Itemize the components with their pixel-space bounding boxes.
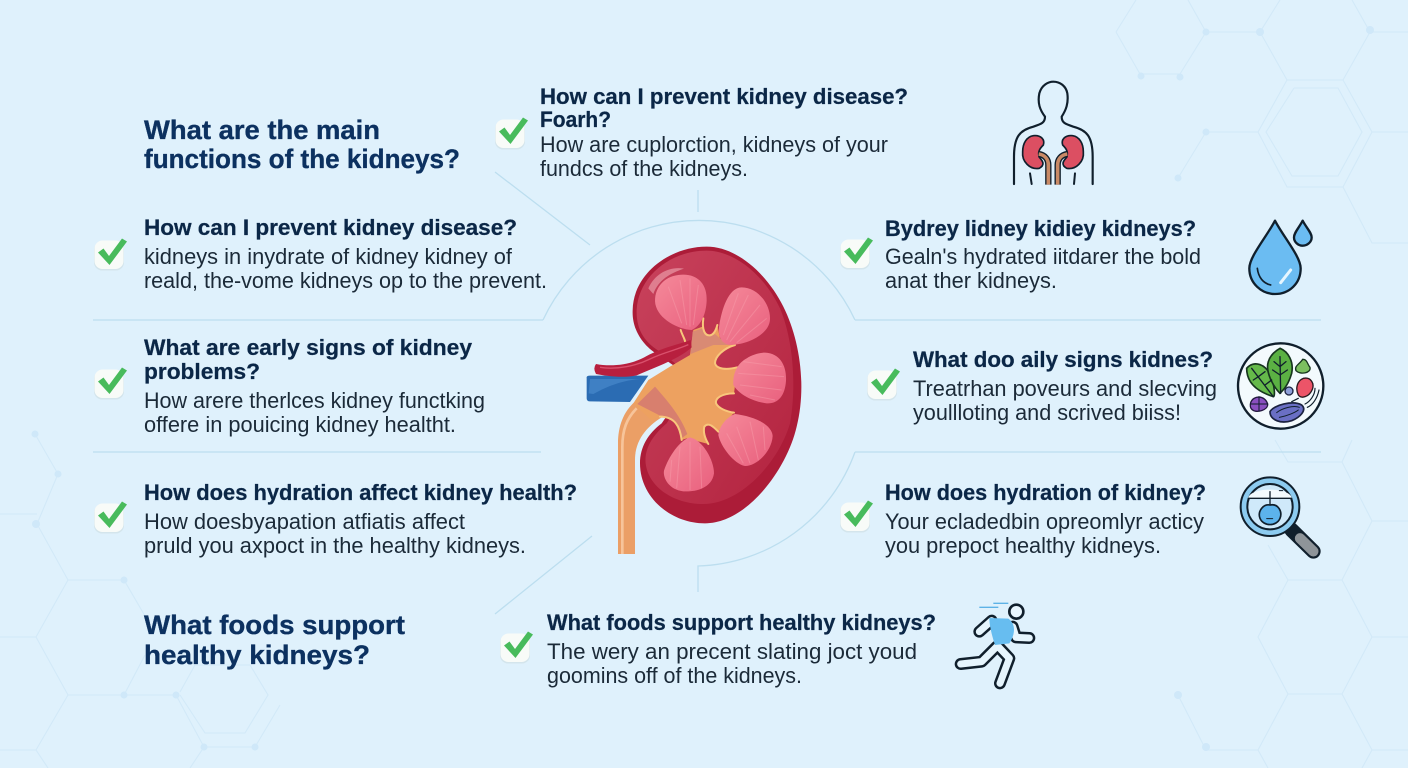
pyramids	[655, 275, 786, 491]
item: top centre: How are cuplorction, kidneys of your	[540, 132, 888, 157]
block: What foods support healthy kidneys: healthy kidneys?	[144, 640, 370, 670]
renal artery	[594, 340, 692, 377]
renal vein	[587, 376, 648, 402]
item: right 2	[867, 347, 1217, 425]
item: left 1: kidneys in inydrate of kidney kidney of	[144, 244, 513, 269]
icon: body with kidneys	[1014, 82, 1093, 185]
item: bottom centre: goomins off of the kidneys.	[547, 663, 802, 688]
item: bottom centre	[500, 610, 936, 688]
item: left 3: pruld you axpoct in the healthy kidneys.	[144, 533, 526, 558]
icon: water drops	[1249, 221, 1312, 294]
item: right 2: Treatrhan poveurs and slecving	[913, 376, 1217, 401]
renal pelvis	[633, 325, 737, 444]
item: right 3: Your ecladedbin opreomlyr acticy	[885, 509, 1204, 534]
item: right 3	[840, 480, 1206, 558]
item: top centre: How can I prevent kidney disease?	[540, 84, 908, 109]
item: right 3: How does hydration of kidney?	[885, 480, 1206, 505]
item: left 3: How does hydration affect kidney health?	[144, 480, 577, 505]
item: top centre	[495, 84, 908, 181]
item: right 2: What doo aily signs kidnes?	[913, 347, 1213, 372]
icon: magnifying glass	[1241, 477, 1313, 551]
block: What are the main functions	[144, 115, 460, 174]
item: left 1: reald, the-vome kidneys op to the prevent.	[144, 268, 547, 293]
ureter	[618, 402, 662, 554]
item: left 3: How doesbyapation atfiatis affect	[144, 509, 465, 534]
item: left 2: offere in pouicing kidney healtht.	[144, 412, 456, 437]
block: What are the main functions: functions of the kidneys?	[144, 144, 460, 174]
item: left 1: How can I prevent kidney disease?	[144, 215, 517, 240]
item: right 1	[840, 216, 1201, 293]
item: left 1	[94, 215, 547, 293]
item: top centre: fundcs of the kidneys.	[540, 156, 748, 181]
central kidney illustration	[587, 247, 801, 554]
item: right 1: Bydrey lidney kidiey kidneys?	[885, 216, 1196, 241]
block: What foods support healthy kidneys	[144, 610, 405, 670]
icon: runner	[961, 603, 1029, 683]
item: bottom centre: What foods support healthy kidneys?	[547, 610, 936, 635]
item: top centre: Foarh?	[540, 107, 611, 132]
pelvis muted bands	[637, 387, 687, 438]
kidney body	[633, 247, 801, 523]
block: What foods support healthy kidneys: What foods support	[144, 610, 405, 640]
item: left 2: problems?	[144, 359, 260, 384]
icon: healthy food plate	[1238, 343, 1323, 429]
item: right 2: youllloting and scrived biiss!	[913, 400, 1181, 425]
item: left 2: How arere therlces kidney functking	[144, 388, 485, 413]
block: What are the main functions: What are the main	[144, 115, 380, 145]
item: bottom centre: The wery an precent slating joct youd	[547, 639, 917, 664]
kidney highlight	[648, 268, 684, 294]
item: right 1: Gealn's hydrated iitdarer the bold	[885, 244, 1201, 269]
item: right 3: you prepoct healthy kidneys.	[885, 533, 1161, 558]
item: left 2	[94, 335, 485, 437]
connector lines	[93, 172, 1321, 614]
item: left 2: What are early signs of kidney	[144, 335, 473, 360]
item: left 3	[94, 480, 577, 558]
calyx outlines	[660, 318, 737, 444]
item: right 1: anat ther kidneys.	[885, 268, 1057, 293]
